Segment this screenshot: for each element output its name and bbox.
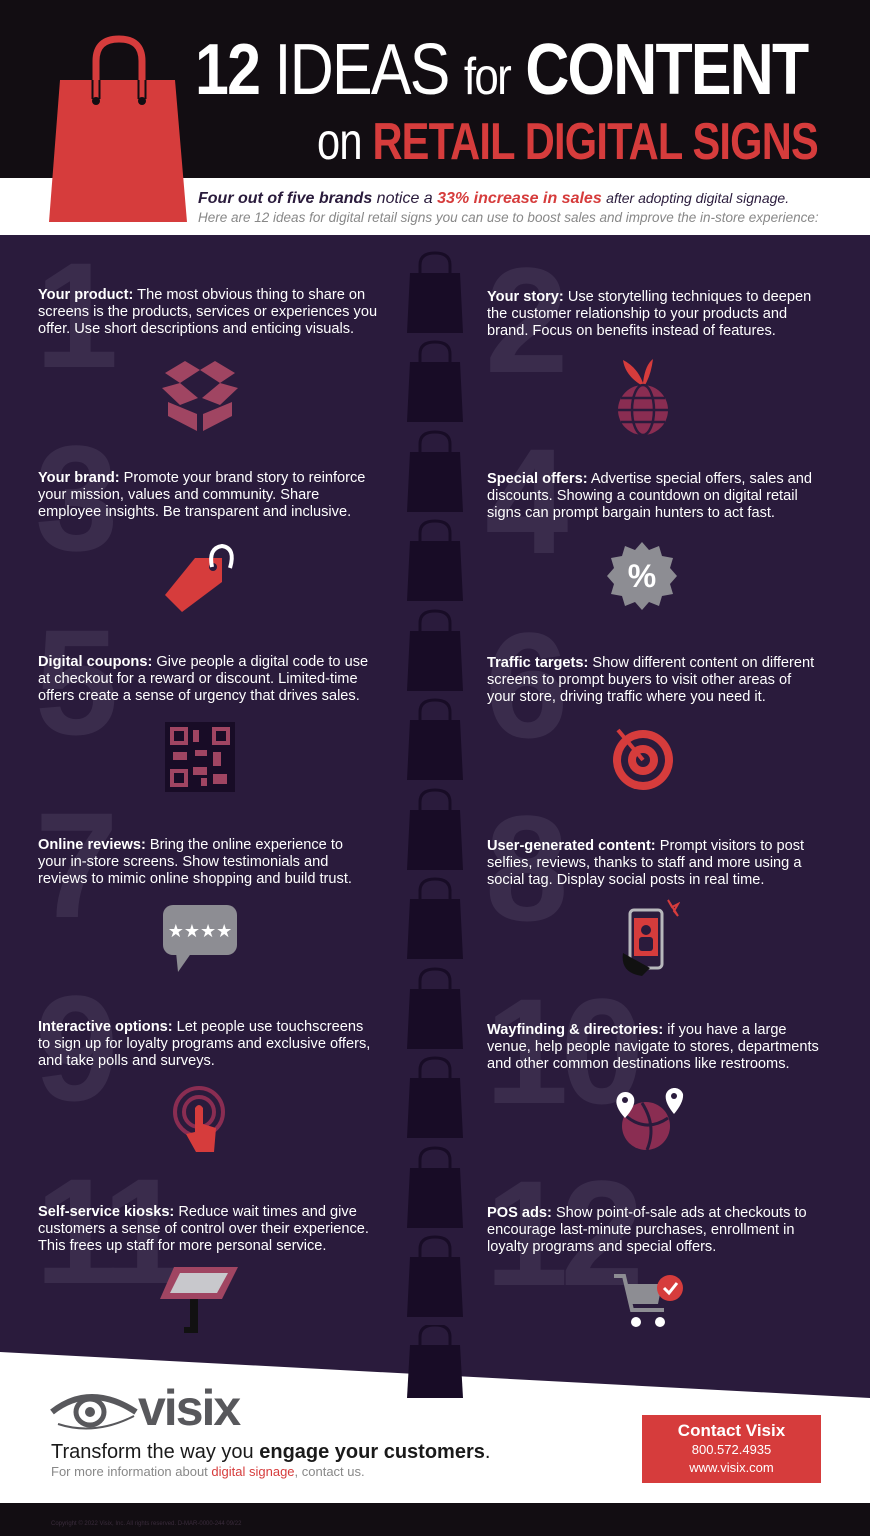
text: digital coupons: at checkout for a reward or discount. Limited-time [38, 671, 358, 687]
text: your story: Your story: Use storytelling techniques to deepen [487, 289, 811, 305]
text: POS ads: loyalty programs and special offers. [487, 1239, 716, 1255]
text: your brand: Your brand: Promote your brand story to reinforce [38, 470, 365, 486]
text: special offers: Special offers: Advertise special offers, sales and [487, 471, 812, 487]
text: kiosks: This frees up staff for more personal service. [38, 1238, 326, 1254]
icon: percent badge [607, 542, 677, 610]
text: POS ads: POS ads: Show point-of-sale ads at checkouts to [487, 1205, 807, 1221]
intro text: Four out of five brands notice a 33% increase in sales after adopting digital signage. [198, 190, 789, 207]
icon: phone selfie [622, 900, 680, 976]
title: 12 IDEAS for CONTENT [195, 30, 808, 110]
text: special offers: discounts. Showing a countdown on digital retail [487, 488, 798, 504]
contact box [642, 1415, 821, 1483]
footer white area [0, 1352, 870, 1503]
text: your product: offer. Use short descriptions and enticing visuals. [38, 321, 354, 337]
text: interactive: to sign up for loyalty programs and exclusive offers, [38, 1036, 370, 1052]
text: wayfinding [487, 1022, 819, 1072]
text: digital coupons [38, 654, 368, 704]
text: your product [38, 287, 377, 337]
contact box: Contact Visix [678, 1421, 785, 1440]
text: special offers: signs can prompt bargain hunters to act fast. [487, 505, 775, 521]
icon: price tag [165, 544, 234, 612]
icon: wayfinding [616, 1088, 684, 1150]
text: user generated: selfies, reviews, thanks to staff and more using a [487, 855, 801, 871]
text: online reviews: reviews to mimic online shopping and build trust. [38, 871, 352, 887]
text: kiosks: customers a sense of control over their experience. [38, 1221, 369, 1237]
text: online reviews: your in-store screens. Show testimonials and [38, 854, 328, 870]
text: 7 [35, 781, 110, 949]
subtitle heading: on RETAIL DIGITAL SIGNS [317, 113, 818, 171]
text: your product: Your product: The most obvious thing to share on [38, 287, 365, 303]
text: 9 [35, 964, 110, 1132]
bag column [407, 252, 463, 1317]
text: 8 [485, 784, 560, 952]
text: interactive: Interactive options: Let people use touchscreens [38, 1019, 363, 1035]
icon: cart [614, 1274, 683, 1327]
icon: QR code [165, 722, 235, 792]
text: wayfinding: and other common destinations like restrooms. [487, 1056, 790, 1072]
icon: touch [173, 1086, 225, 1152]
text: online reviews: Online reviews: Bring the online experience to [38, 837, 343, 853]
text: kiosks: Self-service kiosks: Reduce wait times and give [38, 1204, 357, 1220]
text: your brand [38, 470, 365, 520]
subtitle band [0, 178, 870, 235]
last bag [407, 1325, 463, 1398]
text: your story: brand. Focus on benefits instead of features. [487, 323, 776, 339]
text: 2 [485, 236, 560, 404]
icon: review bubble [163, 905, 237, 972]
text: your brand: your mission, values and community. Share [38, 487, 319, 503]
text: 4 [485, 417, 560, 585]
visix logo: visix [138, 1380, 239, 1436]
tagline: Transform the way you engage your customers. [51, 1441, 490, 1463]
text: interactive: and take polls and surveys. [38, 1053, 215, 1069]
text: 5 [35, 598, 110, 766]
text: your story [487, 289, 811, 339]
text: 10 [485, 967, 636, 1135]
text: special offers [487, 471, 812, 521]
text: wayfinding: Wayfinding & directories: if you have a large [487, 1022, 787, 1038]
text: traffic targets [487, 655, 814, 705]
text: digital coupons: Digital coupons: Give people a digital code to use [38, 654, 368, 670]
text: traffic targets: your store, driving traffic where you need it. [487, 689, 766, 705]
contact box: 800.572.4935 [692, 1442, 771, 1457]
text: 12 [485, 1149, 636, 1317]
text: your brand: employee insights. Be transparent and inclusive. [38, 504, 351, 520]
text: user generated: User-generated content: Prompt visitors to post [487, 838, 804, 854]
text: online reviews [38, 837, 352, 887]
info line: For more information about digital signage, contact us. [51, 1464, 365, 1479]
text: your product: screens is the products, services or experiences you [38, 304, 377, 320]
text: traffic targets: screens to prompt buyers to visit other areas of [487, 672, 791, 688]
intro text [198, 190, 819, 225]
copyright bar: Copyright © 2022 Visix, Inc. All rights reserved. D-MAR-0000-244 09/22 [51, 1521, 241, 1527]
icon: kiosk [160, 1267, 238, 1333]
text: kiosks [38, 1204, 369, 1254]
text: your story: the customer relationship to your products and [487, 306, 787, 322]
icon: target [613, 728, 673, 790]
visix logo [50, 1380, 241, 1436]
text: digital coupons: offers create a sense of urgency that drives sales. [38, 688, 360, 704]
text: POS ads [487, 1205, 807, 1255]
text: 3 [35, 414, 110, 582]
intro text: Here are 12 ideas for digital retail signs you can use to boost sales and improve the in-store experience: [198, 210, 819, 225]
text: POS ads: encourage last-minute purchases, enrollment in [487, 1222, 794, 1238]
text: wayfinding: venue, help people navigate to stores, departments [487, 1039, 819, 1055]
header band [0, 0, 870, 178]
icon: percent badge: % [628, 558, 656, 594]
icon: red shopping bag [49, 36, 187, 222]
text: user generated [487, 838, 804, 888]
icon: open box [162, 361, 238, 431]
text: 6 [485, 601, 560, 769]
contact box: www.visix.com [689, 1460, 774, 1475]
text: traffic targets: Traffic targets: Show different content on different [487, 655, 814, 671]
icon: globe with leaves [618, 359, 668, 435]
text: interactive [38, 1019, 370, 1069]
text: 11 [35, 1147, 178, 1315]
text: user generated: social tag. Display social posts in real time. [487, 872, 764, 888]
copyright bar [0, 1503, 870, 1536]
icon: review bubble: ★★★★ [168, 921, 232, 942]
big numbers: 1 [35, 231, 110, 399]
